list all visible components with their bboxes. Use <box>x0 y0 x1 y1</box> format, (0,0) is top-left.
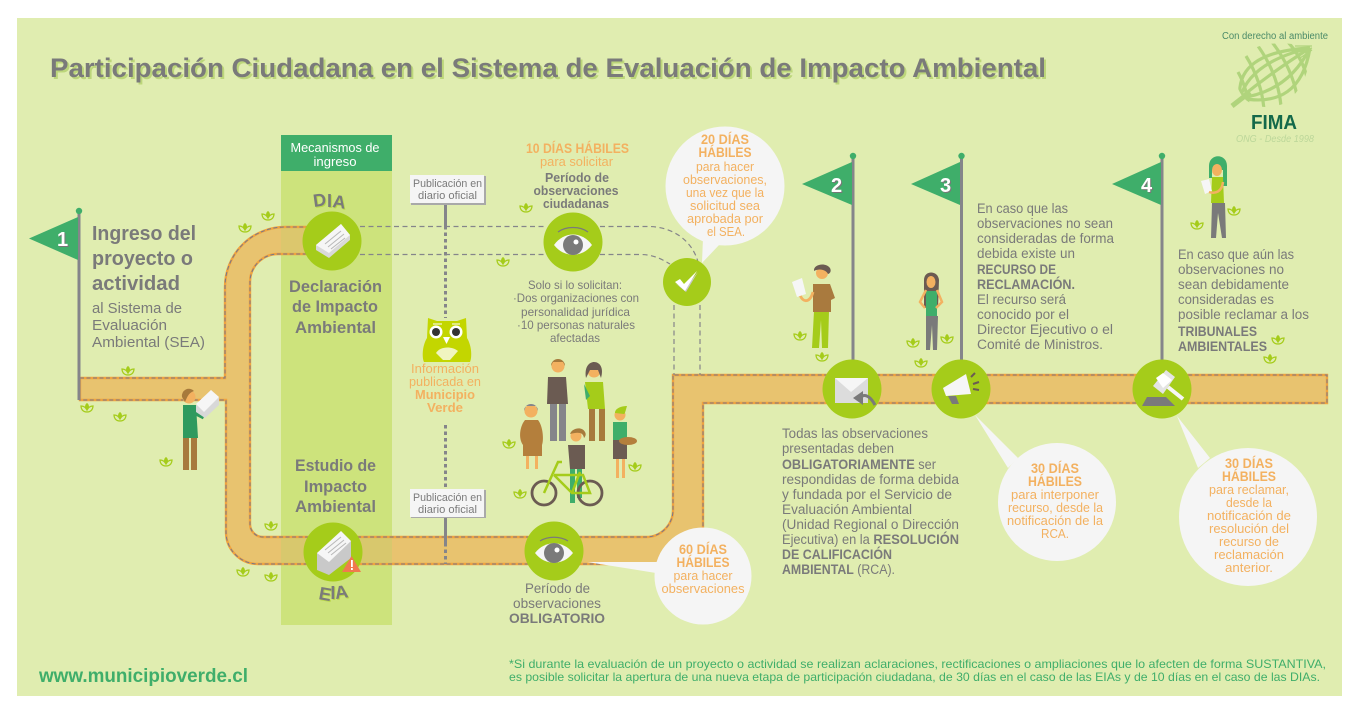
flag 4 <box>1112 153 1165 361</box>
callout: 30 días recurso: RCA. <box>1041 526 1069 541</box>
text block: estudio de impacto ambiental: Impacto <box>304 477 367 496</box>
road path <box>80 227 1327 564</box>
girl with bicycle <box>532 428 602 505</box>
icon: eye bottom <box>524 522 584 580</box>
icon: owl <box>423 318 471 362</box>
text block: ingreso del proyecto: Ingreso del <box>92 223 196 245</box>
text block: ingreso del proyecto: actividad <box>92 273 180 295</box>
text block: recurso de reclamación: consideradas de forma <box>977 231 1114 246</box>
text block: solo si lo solicitan: ·Dos organizaciones con <box>513 291 639 305</box>
text block: todas las observaciones: AMBIENTAL (RCA). <box>782 562 895 577</box>
text block: declaración de impacto ambiental: de Impacto <box>292 297 378 316</box>
flag 2 <box>802 153 856 361</box>
flag 1: 1 <box>57 229 68 251</box>
panel: mecanismos de ingreso column: ingreso <box>314 154 356 169</box>
logo: FIMA: FIMA <box>1251 112 1297 134</box>
callout: 60 días hábiles: observaciones <box>662 581 745 596</box>
flag 1 <box>29 208 82 400</box>
callout: 20 días hábiles: 20 DÍAS <box>701 131 749 147</box>
flag 3: 3 <box>940 175 951 197</box>
text block: declaración de impacto ambiental: Declaración <box>289 277 382 296</box>
callout: 30 días reclamar: para reclamar, <box>1209 482 1289 497</box>
person 3 <box>920 272 942 350</box>
callout: 30 días reclamar <box>1177 416 1317 586</box>
text block: estudio de impacto ambiental <box>295 456 376 516</box>
callout: 60 días hábiles: para hacer <box>674 568 733 583</box>
text block: ingreso del proyecto: Ambiental (SEA) <box>92 334 205 351</box>
DIA label: DIA <box>312 189 347 213</box>
callout: 30 días reclamar: HÁBILES <box>1222 468 1276 484</box>
person 4 reading <box>1201 156 1227 238</box>
text block: período de observaciones obligatorio <box>509 580 605 626</box>
callout: 30 días reclamar: recurso de <box>1219 534 1279 549</box>
text block: recurso de reclamación: El recurso será <box>977 292 1066 307</box>
flag 2: 2 <box>831 175 842 197</box>
text block: declaración de impacto ambiental: Ambiental <box>295 318 376 337</box>
text block: todas las observaciones <box>782 426 959 577</box>
text block: todas las observaciones: Ejecutiva) en la RESOLUCIÓN <box>782 532 959 547</box>
callout: 20 días hábiles <box>666 126 784 263</box>
footnote: *Si durante la evaluación de un proyecto o actividad se realizan aclaraciones, rectificaciones o ampliaciones que lo afecten de forma SUSTANTIVA, <box>509 657 1326 671</box>
text block: recurso de reclamación: En caso que las <box>977 201 1068 216</box>
logo: FIMA <box>1222 31 1328 145</box>
sign: publicación en diario oficial top: Publicación en <box>413 178 482 190</box>
text block: recurso de reclamación: RECLAMACIÓN. <box>977 277 1075 292</box>
text block: tribunales ambientales: En caso que aún las <box>1178 247 1294 262</box>
callout: 30 días reclamar: resolución del <box>1209 521 1289 536</box>
callout: 20 días hábiles: HÁBILES <box>698 144 752 160</box>
sign: publicación en diario oficial top <box>410 175 486 205</box>
flag 3 <box>911 153 965 361</box>
publication timeline pole <box>444 204 447 564</box>
callout: 30 días recurso: para interponer <box>1011 487 1100 502</box>
callout: 60 días hábiles: HÁBILES <box>676 554 730 570</box>
text block: todas las observaciones: (Unidad Regional o Dirección <box>782 517 959 532</box>
text block: 10 días hábiles: ciudadanas <box>543 196 609 211</box>
text block: ingreso del proyecto: al Sistema de <box>92 300 182 317</box>
callout: 60 días hábiles: 60 DÍAS <box>679 541 727 557</box>
text block: tribunales ambientales: posible reclamar a los <box>1178 307 1309 322</box>
icon: mail reply <box>822 360 882 418</box>
illustration: group of citizens <box>520 359 637 505</box>
callout: 20 días hábiles: observaciones, <box>683 172 767 187</box>
callout: 30 días recurso: HÁBILES <box>1028 473 1082 489</box>
text block: estudio de impacto ambiental: Estudio de <box>295 456 376 475</box>
text block: recurso de reclamación: observaciones no sean <box>977 216 1113 231</box>
callout: 20 días hábiles: aprobada por <box>687 211 764 226</box>
decorative sprouts <box>81 203 1284 581</box>
callout: 30 días reclamar: notificación de <box>1207 508 1291 523</box>
icon: EIA document with warning <box>304 522 362 582</box>
person carrying document <box>182 389 219 470</box>
callout: 30 días recurso: notificación de la <box>1007 513 1104 528</box>
icon: eye top <box>544 212 602 272</box>
text block: solo si lo solicitan: ·10 personas naturales <box>517 318 635 332</box>
text block: recurso de reclamación: Comité de Ministros. <box>977 337 1103 352</box>
text block: información municipio verde <box>409 361 481 415</box>
footnote <box>509 657 1326 684</box>
text block: recurso de reclamación: debida existe un <box>977 246 1075 261</box>
icon: gavel <box>1132 360 1192 418</box>
hiker <box>584 362 605 441</box>
callout: 30 días recurso: recurso, desde la <box>1008 500 1104 515</box>
callout: 30 días reclamar: anterior. <box>1225 560 1273 575</box>
title: Participación Ciudadana en el Sistema de Evaluación de Impacto Ambiental <box>50 53 1046 83</box>
text block: información municipio verde: Información <box>411 361 479 376</box>
text block: solo si lo solicitan <box>513 278 639 345</box>
logo: FIMA: ONG - Desde 1998 <box>1236 134 1314 145</box>
text block: ingreso del proyecto: Evaluación <box>92 317 167 334</box>
text block: declaración de impacto ambiental <box>289 277 382 337</box>
callout: 20 días hábiles: el SEA. <box>707 224 745 239</box>
text block: 10 días hábiles: 10 DÍAS HÁBILES <box>526 140 629 156</box>
callout: 20 días hábiles: para hacer <box>696 159 755 174</box>
callout: 20 días hábiles: solicitud sea <box>690 198 761 213</box>
text block: solo si lo solicitan: afectadas <box>550 331 600 345</box>
text block: 10 días hábiles: para solicitar <box>540 154 614 169</box>
panel: mecanismos de ingreso column: Mecanismos de <box>290 140 380 155</box>
text block: ingreso del proyecto: proyecto o <box>92 248 193 270</box>
flag 4: 4 <box>1141 175 1153 197</box>
sign: publicación en diario oficial bottom: diario oficial <box>418 504 477 516</box>
callout: 30 días reclamar: 30 DÍAS <box>1225 455 1273 471</box>
text block: todas las observaciones: OBLIGATORIAMENTE ser <box>782 457 936 472</box>
logo: FIMA: Con derecho al ambiente <box>1222 31 1328 42</box>
panel: mecanismos de ingreso column <box>281 135 392 625</box>
website url: www.municipioverde.cl <box>38 666 248 687</box>
text block: estudio de impacto ambiental: Ambiental <box>295 497 376 516</box>
text block: solo si lo solicitan: Solo si lo solicitan: <box>528 278 622 292</box>
text block: 10 días hábiles: Período de <box>545 170 609 185</box>
text block: todas las observaciones: DE CALIFICACIÓN <box>782 547 892 562</box>
text block: información municipio verde: Verde <box>427 400 463 415</box>
boy with guitar <box>613 406 637 478</box>
icon: megaphone <box>932 360 990 418</box>
text block: 10 días hábiles: observaciones <box>534 183 618 198</box>
text block: período de observaciones obligatorio: Período de <box>525 580 590 596</box>
text block: solo si lo solicitan: personalidad jurídica <box>521 305 630 319</box>
text block: tribunales ambientales <box>1178 247 1309 354</box>
text block: período de observaciones obligatorio: observaciones <box>513 595 601 611</box>
text block: tribunales ambientales: observaciones no <box>1178 262 1284 277</box>
text block: todas las observaciones: respondidas de forma debida <box>782 472 959 487</box>
text block: 10 días hábiles <box>526 140 629 211</box>
text block: todas las observaciones: presentadas deben <box>782 441 894 456</box>
sign: publicación en diario oficial bottom: Publicación en <box>413 492 482 504</box>
text block: ingreso del proyecto <box>92 223 205 351</box>
text block: información municipio verde: Municipio <box>415 387 475 402</box>
callout: 30 días reclamar: desde la <box>1226 495 1273 510</box>
text block: recurso de reclamación: conocido por el <box>977 307 1069 322</box>
icon: DIA document <box>302 212 362 270</box>
callout: 30 días recurso: 30 DÍAS <box>1031 460 1079 476</box>
text block: todas las observaciones: Evaluación Ambiental <box>782 502 912 517</box>
icon: approval check <box>663 258 711 306</box>
text block: período de observaciones obligatorio: OBLIGATORIO <box>509 610 605 626</box>
man in vest <box>547 359 568 441</box>
text block: todas las observaciones: Todas las observaciones <box>782 426 928 441</box>
footnote: es posible solicitar la apertura de una nueva etapa de participación ciudadana, de 30 días en el caso de las EIAs y de 10 días en el caso de las DIAs. <box>509 670 1320 684</box>
callout: 20 días hábiles: una vez que la <box>686 185 765 200</box>
text block: recurso de reclamación <box>977 201 1114 352</box>
callout: 30 días reclamar: reclamación <box>1214 547 1284 562</box>
person 2 with paper <box>792 264 835 348</box>
sign: publicación en diario oficial bottom <box>410 489 486 518</box>
EIA label: EIA <box>317 581 349 605</box>
text block: información municipio verde: publicada en <box>409 374 481 389</box>
sign: publicación en diario oficial top: diario oficial <box>418 190 477 202</box>
callout: 60 días hábiles <box>587 528 752 624</box>
text block: tribunales ambientales: TRIBUNALES <box>1178 324 1257 339</box>
dashed lines: voluntary observation period <box>360 226 700 375</box>
text block: tribunales ambientales: sean debidamente <box>1178 277 1289 292</box>
text block: tribunales ambientales: consideradas es <box>1178 292 1274 307</box>
callout: 30 días recurso <box>975 415 1116 561</box>
old woman <box>520 404 543 469</box>
text block: recurso de reclamación: RECURSO DE <box>977 262 1056 277</box>
text block: todas las observaciones: y fundada por el Servicio de <box>782 487 952 502</box>
text block: recurso de reclamación: Director Ejecutivo o el <box>977 322 1113 337</box>
text block: tribunales ambientales: AMBIENTALES <box>1178 339 1267 354</box>
